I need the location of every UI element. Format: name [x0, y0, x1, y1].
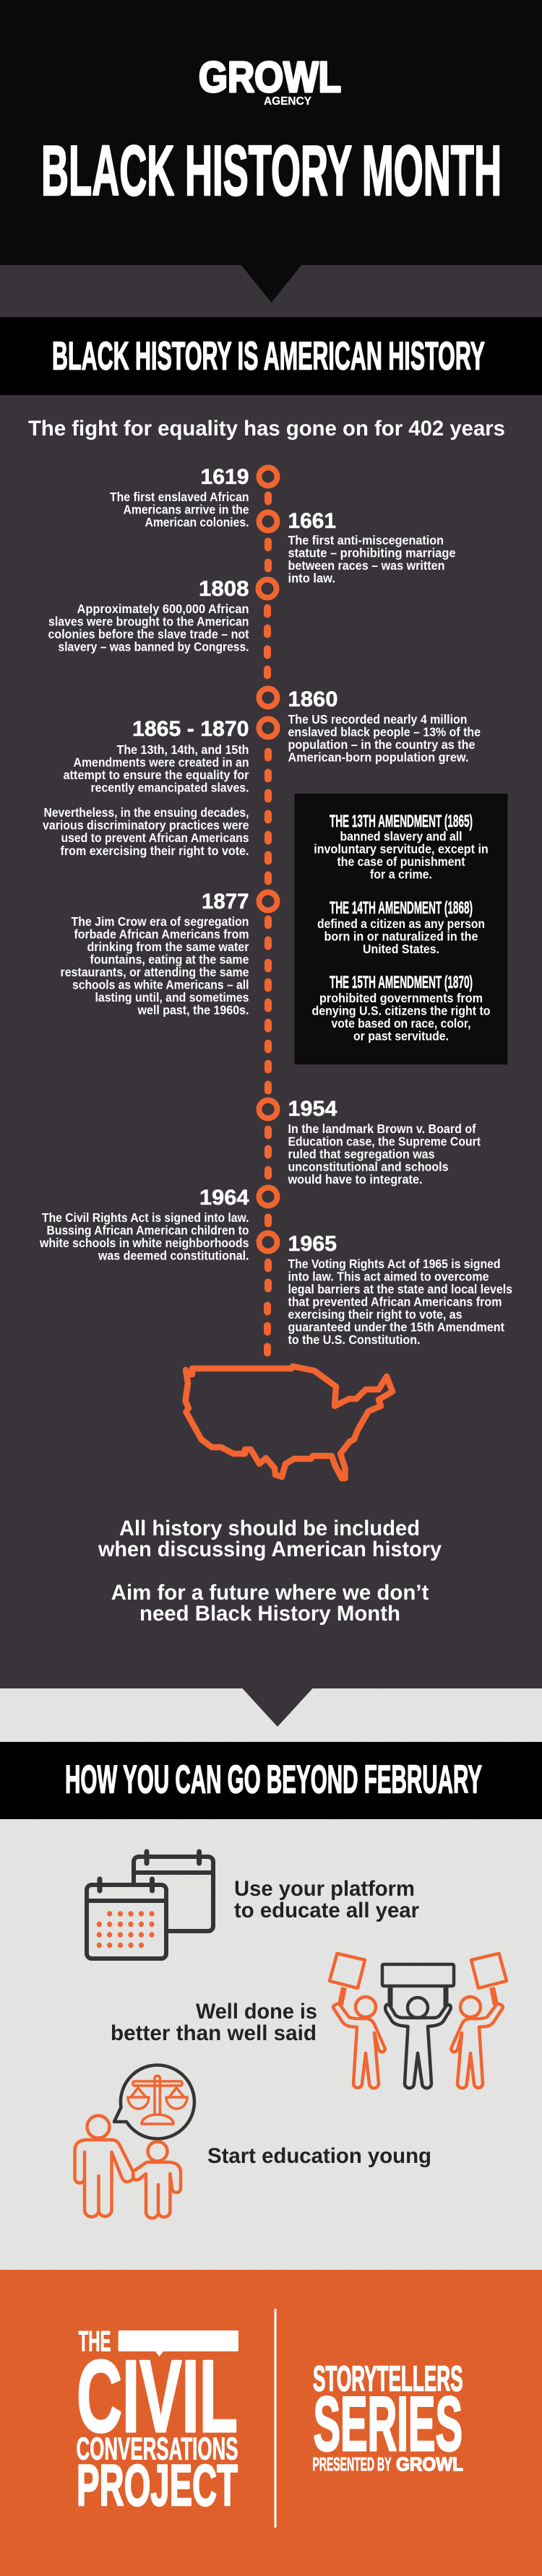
logo: Civil Conversations Project: PROJECT [77, 2453, 238, 2518]
text: well done [111, 2000, 317, 2045]
timeline event: 1877 [61, 890, 278, 1017]
text: use your platform: Use your platform [234, 1877, 415, 1901]
timeline event: 1808 [48, 577, 276, 654]
logo: Growl Agency: AGENCY [264, 95, 311, 108]
timeline event: 1964: white schools in white neighborhoods [39, 1236, 249, 1250]
heading band [0, 1742, 542, 1819]
timeline event: 1661: into law. [288, 571, 335, 585]
text: well done: Well done is [196, 2000, 317, 2024]
timeline event: 1865 - 1870: from exercising their right to vote. [61, 844, 249, 858]
timeline connector dashes [264, 491, 272, 1356]
panel: header [0, 0, 542, 303]
timeline event: 1619: American colonies. [145, 515, 249, 529]
14th amendment [317, 898, 485, 956]
timeline event: 1954 [259, 1097, 481, 1187]
timeline event: 1865 - 1870: various discriminatory practices were [43, 818, 249, 832]
timeline event: 1965: legal barriers at the state and local levels [288, 1282, 512, 1296]
timeline event: 1865 - 1870: attempt to ensure the equality for [64, 768, 249, 782]
icon: USA map outline [185, 1366, 392, 1478]
timeline event: 1965: 1965 [288, 1232, 337, 1256]
timeline event: 1808: colonies before the slave trade – not [48, 627, 249, 641]
timeline event: 1619: Americans arrive in the [123, 503, 249, 517]
logo: Civil Conversations Project: CONVERSATIONS [77, 2431, 238, 2467]
13th amendment: for a crime. [370, 867, 432, 881]
logo: Civil Conversations Project [77, 2325, 238, 2518]
timeline event: 1965 [259, 1232, 512, 1347]
13th amendment: banned slavery and all [340, 829, 463, 844]
timeline event: 1965: guaranteed under the 15th Amendment [288, 1320, 504, 1335]
timeline event: 1808: slavery – was banned by Congress. [58, 640, 249, 654]
timeline event: 1808: Approximately 600,000 African [77, 602, 249, 616]
15th amendment: or past servitude. [353, 1028, 449, 1043]
timeline event: 1661: 1661 [288, 509, 336, 533]
timeline event: 1808: 1808 [199, 577, 249, 601]
timeline event: 1661: The first anti-miscegenation [288, 533, 444, 547]
right protester [451, 1953, 507, 2089]
icon: scales of justice [128, 2076, 187, 2124]
timeline event: 1964: The Civil Rights Act is signed into law. [42, 1210, 249, 1225]
closing statement: all history [98, 1517, 442, 1561]
timeline event: 1865 - 1870: Nevertheless, in the ensuing decades, [43, 805, 249, 820]
timeline event: 1877: schools as white Americans – all [72, 978, 249, 992]
14th amendment: defined a citizen as any person [317, 916, 485, 931]
timeline event: 1877: The Jim Crow era of segregation [71, 914, 249, 929]
left protester [330, 1953, 385, 2089]
timeline event: 1860: The US recorded nearly 4 million [288, 712, 467, 727]
timeline event: 1877: drinking from the same water [87, 940, 249, 954]
13th amendment: the case of punishment [337, 854, 465, 869]
panel: footer [0, 2270, 542, 2576]
timeline event: 1877: well past, the 1960s. [137, 1002, 249, 1017]
timeline event: 1865 - 1870: 1865 - 1870 [132, 717, 249, 741]
15th amendment [312, 973, 490, 1043]
timeline event: 1965: exercising their right to vote, as [288, 1307, 463, 1322]
15th amendment: vote based on race, color, [331, 1016, 471, 1031]
closing statement: aim for a future: need Black History Month [139, 1602, 400, 1626]
timeline event: 1661: between races – was written [288, 558, 445, 573]
timeline event: 1964: was deemed constitutional. [98, 1248, 249, 1262]
calendar date dots [97, 1911, 155, 1948]
timeline event: 1860: population – in the country as the [288, 737, 476, 752]
text: use your platform: to educate all year [234, 1899, 419, 1922]
logo: Storytellers Series [312, 2360, 463, 2475]
timeline event: 1865 - 1870 [43, 717, 278, 858]
timeline event: 1865 - 1870: Amendments were created in an [74, 755, 249, 770]
text: well done: better than well said [111, 2021, 317, 2045]
speech bubble [114, 2065, 194, 2138]
logo: Storytellers Series: GROWL [396, 2453, 463, 2475]
timeline event: 1965: that prevented African Americans from [288, 1294, 502, 1309]
13th amendment [314, 812, 489, 881]
timeline event: 1619 [110, 465, 278, 529]
closing statement: all history: when discussing American history [98, 1538, 442, 1561]
13th amendment: involuntary servitude, except in [314, 842, 489, 857]
timeline event: 1860: 1860 [288, 688, 338, 711]
timeline event: 1877: forbade African Americans from [74, 927, 249, 942]
parent figure [75, 2116, 133, 2217]
text: start education young: Start education young [207, 2144, 431, 2168]
divider [275, 2309, 276, 2528]
icon: calendars [87, 1852, 213, 1959]
section heading: Black history is American history [0, 317, 542, 395]
timeline event: 1964: 1964 [199, 1186, 249, 1210]
timeline event: 1661 [259, 509, 456, 585]
timeline event: 1877: lasting until, and sometimes [95, 990, 249, 1005]
closing statement: all history: All history should be included [119, 1517, 420, 1540]
timeline event: 1619: 1619 [201, 465, 249, 489]
timeline event: 1860: enslaved black people – 13% of the [288, 725, 481, 740]
panel: how you can go beyond February [0, 1688, 542, 2270]
timeline event: 1865 - 1870: The 13th, 14th, and 15th [117, 742, 249, 757]
child figure [133, 2142, 181, 2219]
timeline event: 1954: would have to integrate. [288, 1172, 422, 1187]
timeline event: 1808: slaves were brought to the American [48, 614, 249, 628]
timeline event: 1860: American-born population grew. [288, 750, 468, 764]
timeline event: 1954: In the landmark Brown v. Board of [288, 1122, 476, 1136]
timeline event: 1865 - 1870: used to prevent African Americans [61, 831, 249, 845]
timeline event: 1954: Education case, the Supreme Court [288, 1134, 481, 1148]
timeline event: 1954: ruled that segregation was [288, 1147, 435, 1161]
14th amendment: born in or naturalized in the [324, 929, 478, 943]
speech bubble block [119, 2330, 238, 2356]
logo: Civil Conversations Project: THE [78, 2325, 111, 2357]
timeline event: 1965: into law. This act aimed to overcome [288, 1270, 489, 1284]
closing statement: aim for a future [111, 1581, 429, 1626]
timeline event: 1954: unconstitutional and schools [288, 1160, 449, 1174]
timeline event: 1964: Bussing African American children to [46, 1223, 249, 1238]
15th amendment: denying U.S. citizens the right to [312, 1004, 490, 1018]
timeline event: 1964 [39, 1186, 277, 1262]
timeline event: 1661: statute – prohibiting marriage [288, 546, 456, 560]
timeline event: 1619: The first enslaved African [110, 490, 249, 504]
logo: Civil Conversations Project: CIVIL [77, 2339, 238, 2454]
subheading: The fight for equality has gone on for 402 years [28, 417, 505, 441]
timeline event: 1965: to the U.S. Constitution. [288, 1332, 421, 1347]
timeline event: 1877: fountains, eating at the same [90, 952, 249, 966]
center protester [382, 1964, 454, 2089]
14th amendment: United States. [363, 942, 439, 956]
timeline event: 1877: restaurants, or attending the same [61, 965, 249, 979]
timeline event: 1954: 1954 [288, 1097, 337, 1121]
panel: amendments [295, 794, 507, 1064]
timeline event: 1865 - 1870: recently emancipated slaves. [91, 780, 249, 794]
logo: Growl Agency: GROWL [199, 53, 341, 101]
timeline event: 1860 [259, 688, 481, 764]
timeline event: 1877: 1877 [202, 890, 249, 914]
closing statement: aim for a future: Aim for a future where we don’t [111, 1581, 429, 1605]
15th amendment: prohibited governments from [319, 991, 483, 1005]
panel: timeline background [0, 265, 542, 1688]
text: use your platform [234, 1877, 419, 1922]
timeline event: 1965: The Voting Rights Act of 1965 is signed [288, 1257, 500, 1271]
logo: Storytellers Series: PRESENTED BY [312, 2453, 392, 2475]
icon: protesters with signs [330, 1953, 507, 2089]
icon: parent and child with speech bubble [75, 2065, 194, 2219]
